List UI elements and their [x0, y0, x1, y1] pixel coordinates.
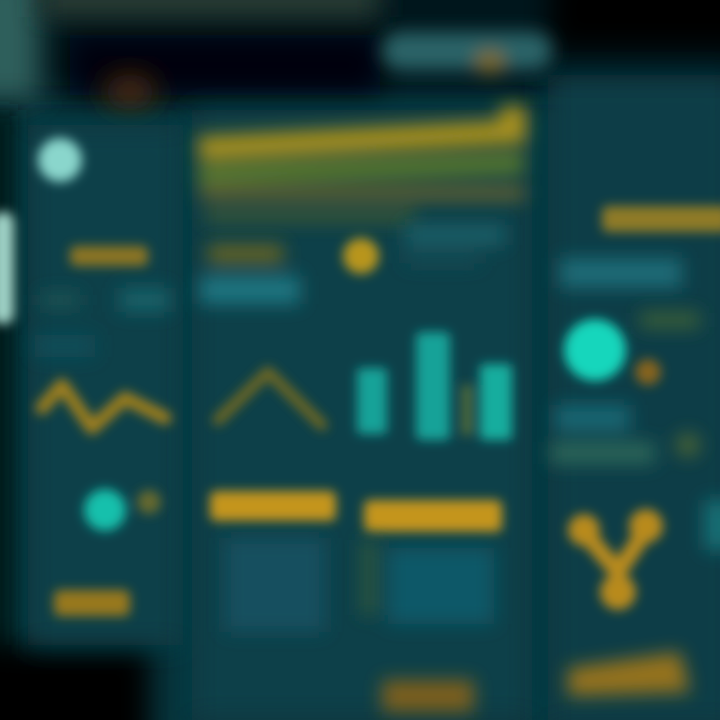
- right heading: [602, 206, 720, 232]
- bottom gold label right: [568, 652, 690, 696]
- icon: orange dot: [635, 359, 661, 385]
- top header shape: [382, 32, 552, 74]
- table left: [225, 538, 325, 632]
- centre sub-heading: [200, 245, 300, 304]
- icon: bright teal circle: [564, 319, 626, 381]
- icon: gold dot: [343, 238, 379, 274]
- left heading: [70, 246, 148, 266]
- bar chart: [357, 332, 512, 440]
- panel: right column: [548, 75, 720, 720]
- icon: pale circle: [38, 138, 82, 182]
- bottom left gold label: [54, 590, 130, 616]
- right edge teal mark: [704, 500, 720, 550]
- chart: left gold line: [42, 385, 165, 428]
- bottom gold label centre: [382, 680, 474, 712]
- left caption: [35, 288, 170, 357]
- left edge light bar: [0, 212, 14, 324]
- panel: left column: [28, 125, 183, 645]
- panel: centre column: [192, 110, 532, 720]
- icon: teal circle with dot: [84, 489, 161, 531]
- title block: [198, 106, 526, 222]
- chart: centre gold line: [218, 372, 322, 425]
- centre caption: [405, 225, 505, 265]
- gold label left: [210, 491, 336, 521]
- icon: gold branching tree: [568, 509, 663, 610]
- table right: [362, 540, 494, 624]
- right sub-heading: [560, 258, 682, 288]
- right caption: [550, 312, 700, 464]
- gold label right: [364, 500, 502, 532]
